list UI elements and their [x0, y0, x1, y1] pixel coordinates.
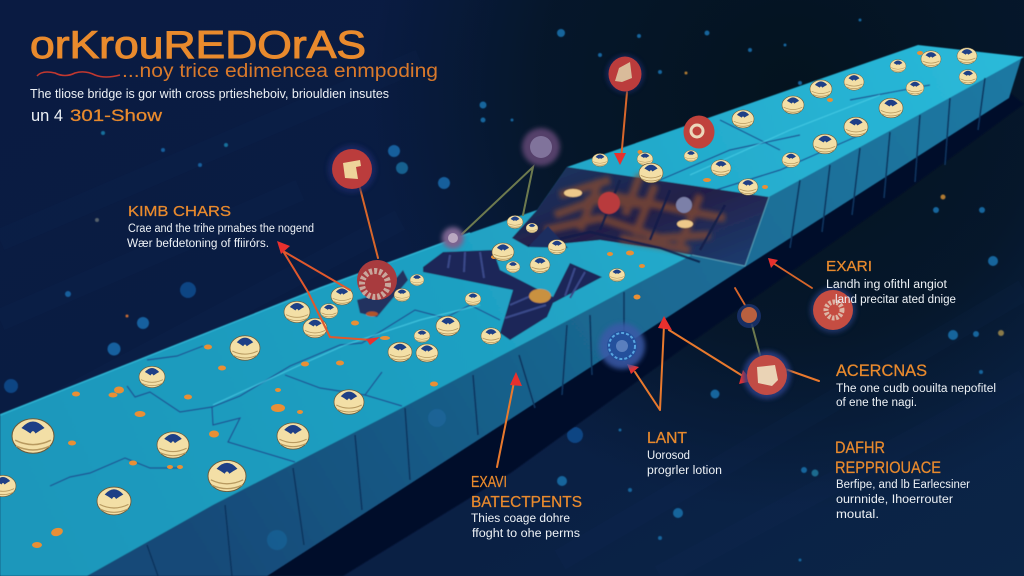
top cracks — [50, 85, 930, 486]
callout: lant — [647, 430, 722, 477]
side cracks — [147, 78, 985, 576]
coins on deck — [0, 48, 977, 515]
callout: exavi batectpents: EXAVI — [471, 474, 507, 491]
callout: exavi batectpents: ffoght to ohe perms — [472, 528, 580, 540]
broken deck flap — [423, 250, 602, 340]
callout: dafhr repprioUace: ournnide, Ihoerrouter — [836, 494, 953, 506]
callout: acercnas: The one cudb oouilta nepofitel — [836, 383, 996, 395]
arrow: kimb chars — [283, 251, 372, 340]
callout: acercnas: of ene the nagi. — [836, 397, 917, 409]
stat value: 301-Show — [70, 106, 163, 125]
olive connector lines — [462, 167, 533, 234]
callout: exari: EXARI — [826, 258, 872, 275]
medallion: deck right — [684, 116, 714, 148]
arrow: batectpents — [497, 382, 514, 467]
callout: exari: land precitar ated dnige — [835, 294, 956, 306]
medallion: purple small — [442, 227, 464, 249]
callout: lant: progrler lotion — [647, 465, 722, 477]
title: orKrouREDOrAS — [30, 24, 366, 67]
callout: dafhr repprioUace — [835, 438, 970, 521]
red arrow heads — [277, 153, 778, 386]
arrow: exari — [735, 263, 812, 305]
top highlights — [213, 95, 880, 405]
callout: dafhr repprioUace: Berfipe, and lb Earlecsiner — [836, 479, 970, 491]
medallion: acercnas — [743, 351, 791, 399]
ramp face — [512, 167, 769, 266]
ramp coins — [564, 189, 582, 197]
orange dots on deck — [32, 51, 923, 548]
arrows: lant — [635, 325, 746, 410]
callout: exavi batectpents — [471, 474, 582, 540]
line: acercnas — [785, 369, 819, 381]
callout: acercnas — [836, 361, 996, 409]
ramp joint flap — [528, 226, 568, 248]
medallion: purple top — [522, 128, 560, 166]
callout: exari — [826, 258, 956, 306]
side dots — [267, 409, 446, 550]
callout: dafhr repprioUace: DAFHR — [835, 438, 885, 457]
medallion: top — [606, 55, 644, 93]
edge highlight — [692, 197, 769, 266]
callout: kimb chars: Wær befdetoning of ffiirórs. — [127, 238, 269, 250]
ramp embedded circles — [598, 192, 620, 214]
title block — [30, 24, 438, 125]
callout: kimb chars: KIMB CHARS — [128, 203, 231, 220]
callout: dafhr repprioUace: REPPRIOUACE — [835, 458, 941, 477]
medallion: deck left — [357, 260, 397, 300]
subtitle: ...noy trice edimencea enmpoding — [122, 61, 438, 82]
medallion: left top — [328, 145, 376, 193]
callout: dafhr repprioUace: moutal. — [836, 509, 879, 521]
callout: exari: Landh ing ofithl angiot — [826, 279, 948, 291]
callout: kimb chars: Crae and the trihe prnabes the nogend — [128, 223, 314, 235]
callout: lant: Uorosod — [647, 450, 690, 462]
connector lines and arrows — [277, 92, 819, 467]
medallions — [328, 55, 856, 399]
callout: exavi batectpents: BATECTPENTS — [471, 494, 582, 511]
medallion: small lower — [737, 304, 761, 328]
medallion: blue flower — [599, 323, 645, 369]
stat line: un 4 — [31, 106, 63, 125]
callout: kimb chars — [127, 203, 314, 250]
arrow: top medallion to deck — [621, 92, 627, 160]
line: left medallion down — [360, 188, 378, 258]
bridge shadow — [267, 92, 1024, 576]
medallion: exari — [810, 287, 856, 333]
callout: acercnas: ACERCNAS — [836, 361, 927, 380]
callout: lant: LANT — [647, 430, 687, 447]
decorative squiggle — [37, 72, 120, 77]
callout: exavi batectpents: Thies coage dohre — [471, 513, 570, 525]
ramp texture — [545, 175, 725, 250]
intro line: The tliose bridge is gor with cross prtiesheboiv, briouldien insutes — [30, 87, 389, 101]
upper flap — [357, 270, 408, 317]
